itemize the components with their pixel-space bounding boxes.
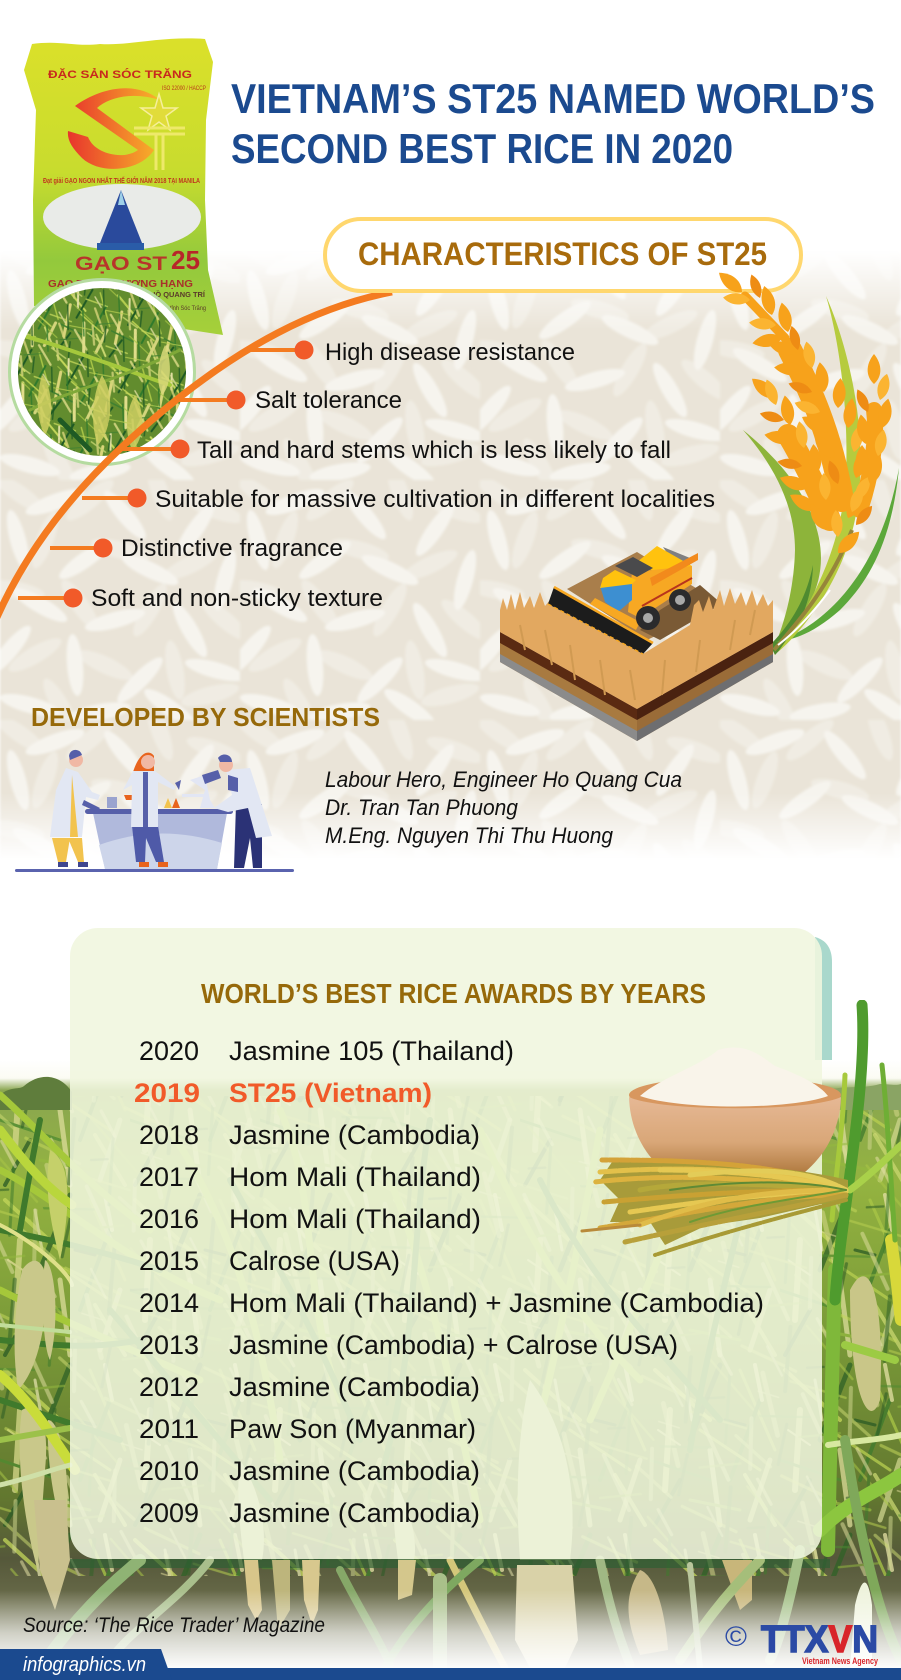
dirt ground: [567, 552, 722, 640]
awards table: 2019: [134, 1078, 200, 1108]
icon: ST25 rice bag: ISO 22000 / HACCP: [162, 86, 206, 92]
awards table: 2015: [139, 1246, 199, 1276]
rice grain background: [0, 250, 901, 860]
icon: ST25 rice bag: GẠO ST: [75, 254, 167, 275]
panicles below panel: [34, 1500, 872, 1668]
awards table: 2010: [139, 1456, 199, 1486]
icon: ST25 rice bag: 25: [171, 245, 200, 275]
developers names: Dr. Tran Tan Phuong: [325, 795, 519, 820]
awards table: Jasmine (Cambodia): [229, 1372, 480, 1402]
grains: [715, 268, 894, 558]
timeline arc with connectors: [0, 292, 392, 624]
awards table: Jasmine 105 (Thailand): [229, 1036, 514, 1066]
heading pill: characteristics of ST25: CHARACTERISTICS OF ST25: [358, 236, 767, 272]
awards table: 2017: [139, 1162, 199, 1192]
awards table: Jasmine (Cambodia) + Calrose (USA): [229, 1330, 678, 1360]
characteristics list: Suitable for massive cultivation in different localities: [155, 486, 715, 513]
right scientist: [214, 755, 272, 868]
front leaves: [0, 1005, 901, 1668]
footer bar: infographics.vn: [23, 1654, 146, 1676]
connector: Tall stems: [120, 440, 190, 458]
lab table: [66, 797, 254, 869]
title: SECOND BEST RICE IN 2020: [231, 125, 733, 172]
distant tree line: [0, 1077, 901, 1110]
characteristics list: Salt tolerance: [255, 387, 402, 414]
connector: Salt tolerance: [178, 390, 246, 410]
middle scientist: [123, 753, 181, 867]
awards table: Jasmine (Cambodia): [229, 1456, 480, 1486]
awards table: Paw Son (Myanmar): [229, 1414, 476, 1444]
title: [231, 75, 875, 172]
icon: ST25 rice bag: tỉnh Sóc Trăng: [170, 305, 206, 312]
awards table: 2018: [139, 1120, 199, 1150]
characteristics list: Soft and non-sticky texture: [91, 585, 383, 612]
developers names: [325, 767, 682, 848]
back leaves: [0, 1095, 760, 1520]
soil block: [500, 632, 773, 741]
panel bottom-edge dark zone: [70, 1559, 830, 1568]
characteristics list: Distinctive fragrance: [121, 535, 343, 562]
heading pill: characteristics of ST25: [325, 219, 801, 291]
rice field photo background: [0, 1005, 901, 1668]
awards table: Jasmine (Cambodia): [229, 1120, 480, 1150]
awards table: [134, 1036, 764, 1528]
icon: ST25 rice bag: GẠO THƠM HƯƠNG HẠNG: [48, 279, 193, 290]
developers names: Labour Hero, Engineer Ho Quang Cua: [325, 767, 682, 792]
developers names: M.Eng. Nguyen Thi Thu Huong: [325, 823, 614, 848]
characteristics list: High disease resistance: [325, 339, 575, 366]
source: Source: ‘The Rice Trader’ Magazine: [23, 1614, 325, 1637]
awards table: 2013: [139, 1330, 199, 1360]
left scientist: [50, 750, 100, 867]
logo: TTXVN: TTXVN: [761, 1619, 878, 1661]
panel shadow: [815, 937, 832, 1095]
icon: rice sheaf: [715, 268, 899, 655]
footer bar: [0, 1649, 901, 1680]
rice sheaf: [582, 1160, 848, 1255]
icon: ST25 rice bag: ĐẶC SẢN SÓC TRĂNG: [48, 68, 192, 81]
icon: scientists in lab: [15, 750, 294, 872]
panel heading: WORLD’S BEST RICE AWARDS BY YEARS: [201, 978, 706, 1009]
connector: Fragrance: [50, 538, 112, 558]
logo: TTXVN: Vietnam News Agency: [802, 1656, 878, 1666]
heading: developed by scientists: DEVELOPED BY SCIENTISTS: [31, 702, 380, 732]
characteristics list: [91, 339, 715, 612]
wheels: [636, 589, 691, 630]
awards table: 2020: [139, 1036, 199, 1066]
awards table: 2009: [139, 1498, 199, 1528]
awards table: 2011: [139, 1414, 199, 1444]
icon: rice bowl with sheaf: [582, 1048, 848, 1255]
awards table: Hom Mali (Thailand): [229, 1162, 481, 1192]
dense grain masses: [745, 296, 875, 520]
awards table: Hom Mali (Thailand) + Jasmine (Cambodia): [229, 1288, 764, 1318]
logo: TTXVN: [725, 1619, 878, 1666]
icon: isometric field with harvester: [500, 546, 773, 741]
photo: rice plants in circle: [8, 278, 200, 470]
awards table: ST25 (Vietnam): [229, 1078, 432, 1108]
connector: Texture: [18, 588, 82, 608]
body: [590, 546, 698, 630]
panel background: [70, 928, 822, 1559]
crops: [500, 588, 773, 709]
panicles left: [15, 1150, 881, 1570]
icon: ST25 rice bag: HỒ QUANG TRÍ: [150, 289, 206, 299]
awards table: 2014: [139, 1288, 199, 1318]
awards table: Calrose (USA): [229, 1246, 400, 1276]
awards table: 2016: [139, 1204, 199, 1234]
logo: TTXVN: ©: [725, 1621, 747, 1652]
awards table: Jasmine (Cambodia): [229, 1498, 480, 1528]
floor line: [15, 869, 294, 872]
leaves: [743, 296, 899, 655]
icon: ST25 rice bag: [24, 38, 223, 335]
awards table: 2012: [139, 1372, 199, 1402]
panel: world's best rice awards: [70, 928, 822, 1559]
header reel: [548, 587, 653, 654]
characteristics list: Tall and hard stems which is less likely to fall: [197, 437, 671, 464]
connector: High disease resistance: [247, 340, 314, 360]
microscope: [182, 770, 221, 808]
connector: Massive cultivation: [82, 488, 146, 508]
icon: ST25 rice bag: Đạt giải GẠO NGON NHẤT THẾ GIỚI NĂM 2018 TẠI MANILA: [43, 175, 200, 185]
awards table: Hom Mali (Thailand): [229, 1204, 481, 1234]
